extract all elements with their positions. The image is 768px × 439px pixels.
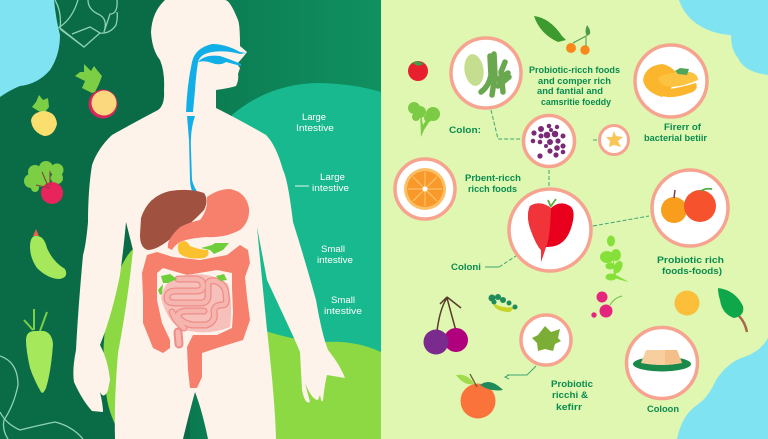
- text: colon lower: Coloon: [647, 404, 679, 415]
- label: small intestive lower: intestive: [324, 306, 362, 316]
- text: probiotic rich and kefir: Probiotic: [551, 379, 593, 390]
- food circle: mango slices: [635, 45, 707, 117]
- arrow: to peach: [505, 366, 536, 379]
- label: large intestive upper: Large: [302, 112, 326, 122]
- text: probiotic rich and kefir: [551, 379, 593, 413]
- text: probiotic rich foods paragraph: [529, 65, 620, 108]
- text: probiotic rich foods paragraph: and fantial and: [537, 86, 603, 97]
- panel: left background: [0, 0, 381, 439]
- food circle: red apple: [509, 189, 591, 271]
- food icon: cucumber: [30, 229, 66, 279]
- illustration: human body silhouette: [73, 0, 345, 439]
- label: large intestive lower: Large: [320, 172, 345, 182]
- food icon: yellow potato: [31, 95, 57, 136]
- text: prebiotic rich foods: Prbent-ricch: [465, 173, 521, 184]
- text: probiotic rich foods paragraph: camsritie foeddy: [541, 97, 612, 108]
- connectors: dashed lines: [485, 110, 649, 267]
- label: large intestive upper: Intestive: [296, 123, 334, 133]
- panel: right background: [381, 0, 768, 439]
- text: probiotic rich foods paragraph: Probiotic-ricch foods: [529, 65, 620, 76]
- decorative outline: bottom-left curve: [0, 356, 83, 439]
- food icon: radish slice: [75, 64, 118, 118]
- food icon: tomato: [408, 61, 428, 81]
- food icon: pink berries: [591, 292, 622, 318]
- label: large intestive upper: [296, 112, 334, 133]
- food icon: yellow fruit: [674, 290, 700, 316]
- blob: bottom right: [677, 338, 768, 439]
- text: colon middle: Coloni: [451, 262, 481, 273]
- food icon: peach: [456, 374, 503, 418]
- food icon: green leaf: [718, 288, 747, 332]
- food circle: orange slice: [395, 159, 455, 219]
- label: small intestive upper: intestive: [317, 255, 353, 265]
- label: large intestive lower: intestive: [312, 183, 349, 193]
- label: small intestive lower: Small: [331, 295, 355, 305]
- food icon: broccoli with yellow: [488, 294, 518, 312]
- text: probiotic rich foods paragraph: and comper rich: [538, 76, 611, 87]
- text: probiotic rich and kefir: ricchi &: [552, 390, 588, 401]
- text: prebiotic rich foods: [465, 173, 521, 195]
- text: prebiotic rich foods: ricch foods: [468, 184, 517, 195]
- food circle: green star: [521, 315, 571, 365]
- food circle: asparagus and leaf: [451, 38, 521, 108]
- food icon: green carrot: [24, 309, 53, 393]
- label: small intestive upper: Small: [321, 244, 345, 254]
- text: probiotic rich foods right: foods-foods): [662, 266, 722, 277]
- food circle: cake on plate: [626, 328, 698, 398]
- text: fiber of bacterial benefit: [644, 122, 707, 144]
- text: colon upper: Colon:: [449, 125, 481, 136]
- organ: small intestine: [158, 274, 231, 344]
- organ: pancreas: [178, 241, 229, 258]
- organ: esophagus and airway: [186, 44, 246, 206]
- text: probiotic rich and kefir: kefirr: [556, 402, 582, 413]
- label: small intestive lower: [324, 295, 362, 316]
- label: small intestive upper: [317, 244, 353, 265]
- food icon: orange cherries: [566, 25, 590, 55]
- food circle: star fruit: [600, 126, 628, 154]
- organ: large intestine (colon): [142, 245, 250, 388]
- text: fiber of bacterial benefit: bacterial betiir: [644, 133, 707, 144]
- food icon: beet with leaves: [24, 161, 64, 204]
- food icon: green pod: [534, 16, 566, 42]
- blob: top right: [679, 0, 768, 75]
- text: probiotic rich foods right: Probiotic rich: [657, 255, 724, 266]
- organ: stomach: [168, 189, 249, 250]
- food circle: purple berries: [524, 116, 574, 166]
- decorative outline: top vine: [55, 0, 117, 47]
- text: fiber of bacterial benefit: Firerr of: [664, 122, 702, 133]
- food icon: herb sprig: [600, 236, 628, 282]
- organ: liver: [140, 190, 206, 250]
- food circle: orange and apple: [652, 170, 728, 246]
- food icon: parsley: [408, 102, 440, 137]
- food icon: cherries: [424, 297, 468, 354]
- text: probiotic rich foods right: [657, 255, 724, 277]
- label: large intestive lower: [295, 172, 349, 193]
